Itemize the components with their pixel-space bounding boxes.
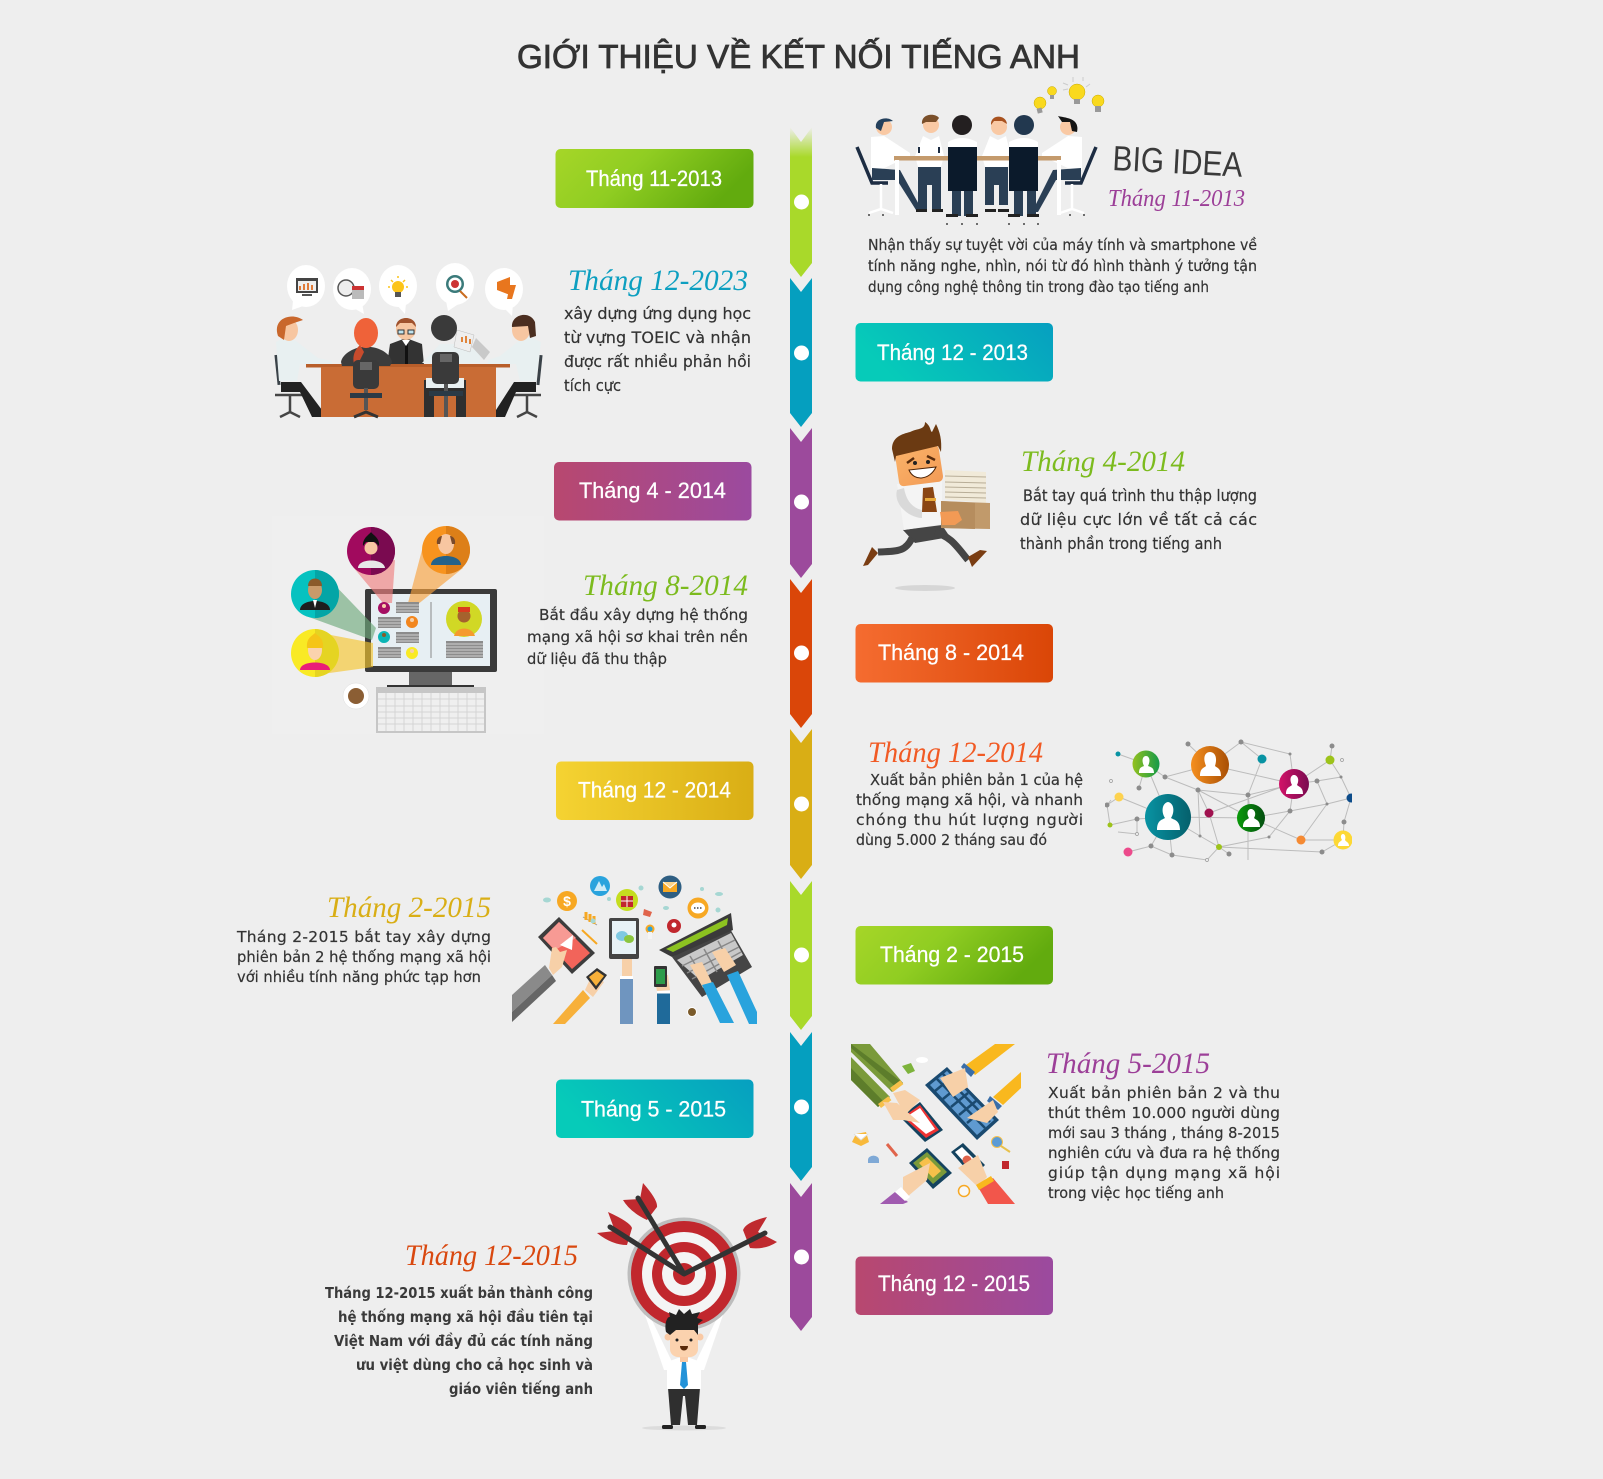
- panel: Tháng 8-2014: [272, 516, 748, 734]
- panel: Tháng 2-2015: [236, 876, 757, 1024]
- body text: Bắt đầu xây dựng hệ thống: [539, 606, 748, 624]
- date pill: Tháng 4 - 2014: [554, 462, 752, 520]
- illustration: running man carrying box of papers: [863, 422, 990, 591]
- date pill: Tháng 12 - 2013: Tháng 12 - 2013: [877, 340, 1028, 365]
- illustration: hands using devices: $: [563, 893, 571, 909]
- body text: Nhận thấy sự tuyệt vời của máy tính và smartphone về: [868, 236, 1257, 254]
- date pill: Tháng 5 - 2015: Tháng 5 - 2015: [581, 1096, 726, 1122]
- body text: thút thêm 10.000 người dùng: [1048, 1104, 1280, 1122]
- infographic canvas: [236, 38, 1352, 1430]
- body text: dụng công nghệ thông tin trong đào tạo tiếng anh: [868, 278, 1209, 296]
- body text: dùng 5.000 2 tháng sau đó: [856, 831, 1047, 849]
- heading: Tháng 5-2015: [1046, 1047, 1210, 1080]
- panel: Tháng 12-2014: [856, 736, 1356, 862]
- illustration: office meeting with speech bubbles: [274, 263, 543, 417]
- body text: [527, 606, 748, 668]
- body text: [564, 304, 751, 395]
- big idea lettering: BIG IDEA: [1112, 139, 1244, 185]
- heading: Tháng 12-2023: [568, 264, 748, 297]
- date pill: Tháng 2 - 2015: Tháng 2 - 2015: [880, 942, 1024, 967]
- heading: Tháng 2-2015: [327, 891, 491, 924]
- date pill: Tháng 12 - 2014: [556, 762, 754, 820]
- body text: được rất nhiều phản hồi: [564, 352, 751, 371]
- body text: Tháng 12-2015 xuất bản thành công: [325, 1284, 593, 1302]
- illustration: hands using devices: [512, 876, 757, 1024]
- title: GIỚI THIỆU VỀ KẾT NỐI TIẾNG ANH: [517, 37, 1080, 75]
- panel: Tháng 5-2015: [851, 1044, 1280, 1204]
- body text: thống mạng xã hội, và nhanh: [856, 791, 1083, 809]
- date pill: Tháng 4 - 2014: Tháng 4 - 2014: [579, 478, 726, 503]
- body text: phiên bản 2 hệ thống mạng xã hội: [237, 948, 491, 966]
- body text: dữ liệu đã thu thập: [527, 650, 667, 668]
- body text: trong việc học tiếng anh: [1048, 1184, 1224, 1202]
- body text: [325, 1284, 593, 1398]
- date pill: Tháng 12 - 2015: Tháng 12 - 2015: [878, 1271, 1030, 1296]
- body text: mới sau 3 tháng , tháng 8-2015: [1048, 1124, 1280, 1142]
- illustration: team meeting with light bulbs: [857, 77, 1104, 225]
- date pill: Tháng 12 - 2015: [856, 1256, 1053, 1315]
- body text: [1048, 1084, 1280, 1202]
- illustration: man holding target with arrows: [597, 1183, 777, 1430]
- heading: Tháng 11-2013: [1108, 186, 1245, 212]
- date pill: Tháng 11-2013: Tháng 11-2013: [586, 166, 722, 191]
- body text: xây dựng ứng dụng học: [564, 304, 751, 323]
- date pill: Tháng 5 - 2015: [556, 1080, 754, 1138]
- panel: Tháng 4-2014: [863, 422, 1257, 591]
- body text: dữ liệu cực lớn về tất cả các: [1020, 510, 1257, 529]
- body text: nghiên cứu và đưa ra hệ thống: [1048, 1144, 1280, 1162]
- body text: [236, 928, 491, 986]
- body text: tính năng nghe, nhìn, nói từ đó hình thành ý tưởng tận: [868, 257, 1257, 275]
- body text: Bắt tay quá trình thu thập lượng: [1023, 486, 1257, 505]
- body text: [1020, 486, 1257, 553]
- date pill: Tháng 2 - 2015: [856, 926, 1053, 984]
- body text: chóng thu hút lượng người: [856, 811, 1083, 829]
- timeline ribbon: [790, 127, 812, 1331]
- body text: ưu việt dùng cho cả học sinh và: [356, 1356, 593, 1374]
- date pill: Tháng 8 - 2014: [856, 624, 1053, 682]
- illustration: social network graph: [1104, 740, 1356, 862]
- panel: Tháng 12-2023: [274, 263, 751, 417]
- body text: [856, 771, 1083, 849]
- illustration: computer with social network profiles: [272, 516, 544, 734]
- body text: với nhiều tính năng phức tạp hơn: [237, 968, 481, 986]
- body text: Tháng 2-2015 bắt tay xây dựng: [236, 928, 491, 946]
- date pill: Tháng 8 - 2014: Tháng 8 - 2014: [878, 640, 1024, 665]
- body text: Xuất bản phiên bản 1 của hệ: [870, 771, 1083, 789]
- body text: mạng xã hội sơ khai trên nền: [527, 628, 748, 646]
- body text: Việt Nam với đầy đủ các tính năng: [334, 1332, 593, 1350]
- body text: giúp tận dụng mạng xã hội: [1048, 1164, 1280, 1182]
- panel: Tháng 11-2013 big idea: [857, 77, 1257, 296]
- body text: giáo viên tiếng anh: [449, 1379, 593, 1398]
- body text: Xuất bản phiên bản 2 và thu: [1048, 1084, 1280, 1102]
- date pill: Tháng 11-2013: [556, 149, 754, 208]
- body text: thành phần trong tiếng anh: [1020, 534, 1222, 553]
- date pill: Tháng 12 - 2013: [856, 323, 1053, 382]
- heading: Tháng 12-2015: [405, 1239, 578, 1272]
- heading: Tháng 12-2014: [868, 736, 1043, 769]
- heading: Tháng 4-2014: [1021, 445, 1185, 478]
- date pill: Tháng 12 - 2014: Tháng 12 - 2014: [578, 778, 731, 802]
- body text: [868, 236, 1257, 296]
- body text: hệ thống mạng xã hội đầu tiên tại: [338, 1307, 593, 1326]
- heading: Tháng 8-2014: [583, 569, 748, 602]
- body text: tích cực: [564, 376, 621, 395]
- illustration: hands with tablets and keyboard: [851, 1044, 1021, 1204]
- panel: Tháng 12-2015: [325, 1183, 777, 1430]
- body text: từ vựng TOEIC và nhận: [564, 328, 751, 347]
